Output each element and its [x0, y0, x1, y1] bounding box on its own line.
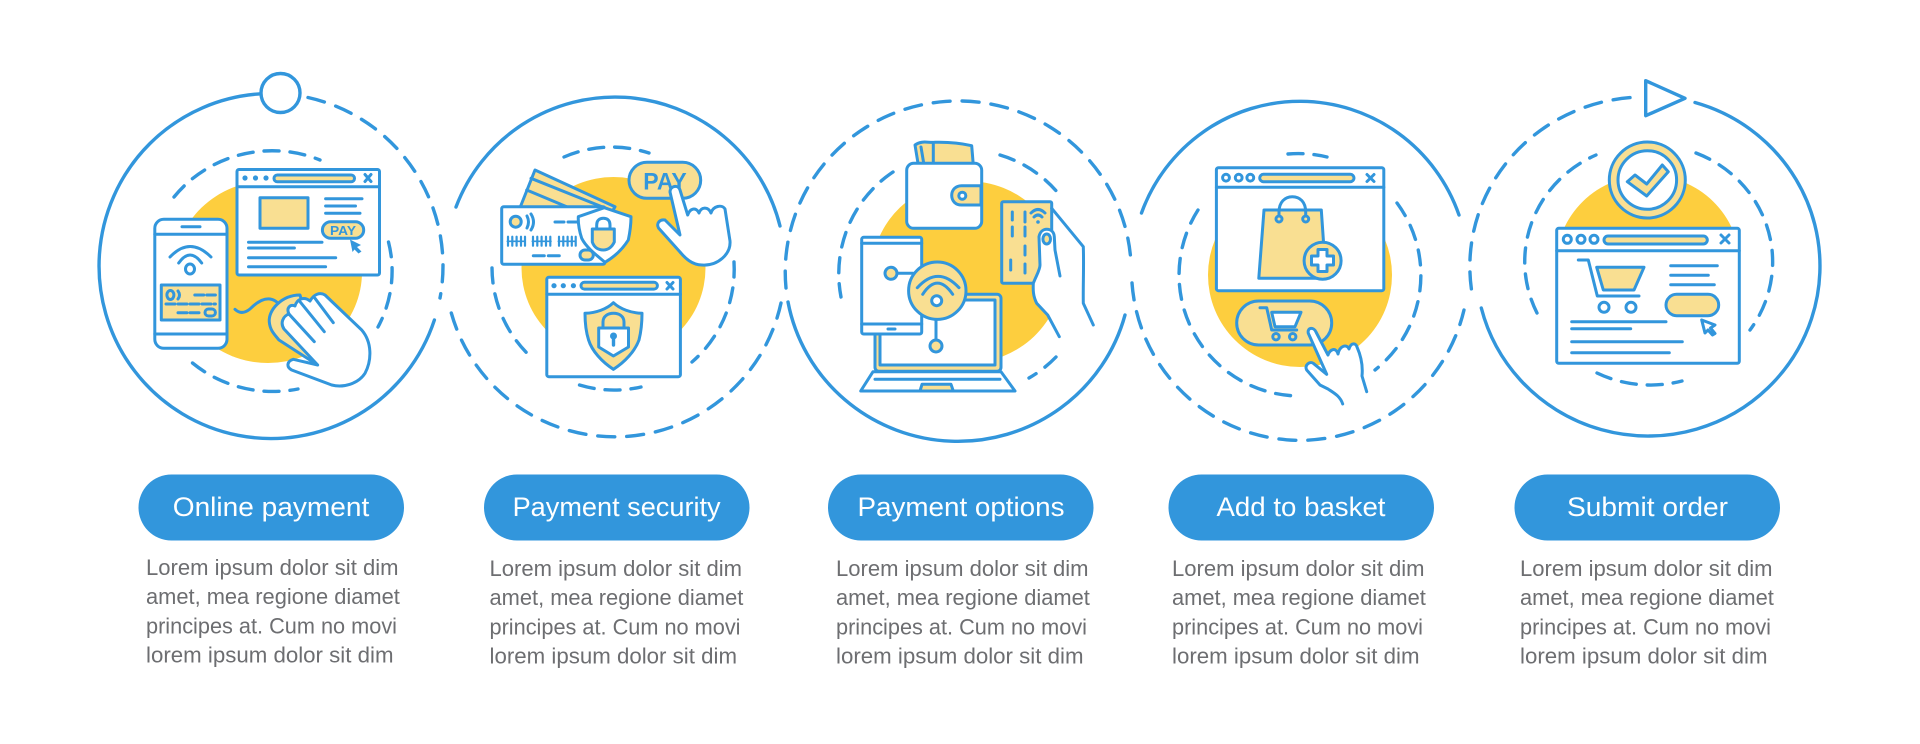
icon: tablet: [862, 237, 922, 334]
icon: hand on computer mouse: [235, 294, 370, 386]
icon: approval check badge: [1609, 142, 1685, 218]
body text 3: amet, mea regione diamet: [836, 585, 1090, 610]
yellow blob 2: [522, 177, 706, 359]
body text 5: amet, mea regione diamet: [1520, 585, 1774, 610]
panel: online payment: [99, 74, 443, 439]
icon: cart button with pointing hand: [1237, 301, 1367, 404]
body text 5: lorem ipsum dolor sit dim: [1520, 644, 1768, 668]
body text 4: Lorem ipsum dolor sit dim: [1172, 556, 1424, 581]
body text 2: Lorem ipsum dolor sit dim: [490, 556, 742, 581]
yellow blob 5: [1556, 175, 1740, 355]
body text 5: Lorem ipsum dolor sit dim: [1520, 556, 1772, 581]
yellow blob 1: [174, 181, 362, 363]
ring 4: [1132, 101, 1464, 440]
body text 5: [1520, 556, 1774, 668]
yellow blob 3: [872, 181, 1062, 363]
body text 1: Lorem ipsum dolor sit dim: [146, 555, 398, 580]
body text 4: principes at. Cum no movi: [1172, 614, 1423, 640]
icon: pay button with pointing hand: PAY: [643, 168, 687, 195]
body text 5: principes at. Cum no movi: [1520, 614, 1771, 640]
icon: laptop: [861, 294, 1015, 391]
body text 2: amet, mea regione diamet: [490, 585, 743, 610]
icon: browser window with shield: [547, 277, 680, 377]
body text 4: amet, mea regione diamet: [1172, 585, 1426, 610]
step pill: payment options: [828, 474, 1094, 540]
yellow blob 4: [1208, 183, 1392, 367]
panel: payment options: [785, 101, 1131, 441]
body text 1: lorem ipsum dolor sit dim: [146, 642, 394, 668]
step pill: add to basket: [1168, 474, 1434, 540]
icon: pay button with pointing hand: [629, 162, 730, 265]
step pill: submit order: [1514, 474, 1780, 540]
body text 3: lorem ipsum dolor sit dim: [836, 644, 1084, 668]
body text 1: [146, 555, 400, 668]
body text 1: amet, mea regione diamet: [146, 584, 400, 609]
step pill: submit order: Submit order: [1567, 492, 1728, 522]
icon: wifi network hub: [885, 262, 966, 352]
end marker triangle: [1646, 81, 1685, 116]
ring 1: [99, 94, 443, 439]
icon: wallet with cash: [907, 142, 982, 228]
icon: browser window with pay button: [237, 170, 380, 275]
icon: hand holding card: [1002, 202, 1093, 340]
icon: smartphone with wifi and card: [155, 219, 227, 348]
body text 3: [836, 556, 1090, 668]
body text 2: lorem ipsum dolor sit dim: [490, 644, 737, 668]
body text 2: [490, 556, 743, 668]
step pill: payment security: Payment security: [513, 492, 721, 522]
step pill: add to basket: Add to basket: [1216, 492, 1386, 522]
panel: add to basket: [1132, 101, 1464, 440]
body text 3: Lorem ipsum dolor sit dim: [836, 556, 1088, 581]
ring 3: [785, 101, 1131, 441]
step pill: payment security: [484, 474, 750, 540]
icon: credit cards with shield: [502, 170, 631, 264]
ring 2: [451, 97, 781, 437]
body text 3: principes at. Cum no movi: [836, 614, 1087, 640]
step pill: online payment: Online payment: [173, 492, 370, 522]
icon: browser window with shopping bag: [1216, 168, 1384, 291]
panel: submit order: [1470, 81, 1820, 436]
panel: payment security: [451, 97, 781, 437]
body text 1: principes at. Cum no movi: [146, 614, 397, 638]
body text 2: principes at. Cum no movi: [490, 614, 740, 640]
body text 4: [1172, 556, 1426, 668]
start marker circle: [261, 74, 300, 112]
icon: checkout window: [1557, 228, 1739, 363]
body text 4: lorem ipsum dolor sit dim: [1172, 644, 1420, 668]
step pill: payment options: Payment options: [858, 492, 1064, 522]
ring 5: [1470, 98, 1820, 436]
icon: browser window with pay button: PAY: [330, 223, 356, 238]
step pill: online payment: [138, 474, 404, 540]
